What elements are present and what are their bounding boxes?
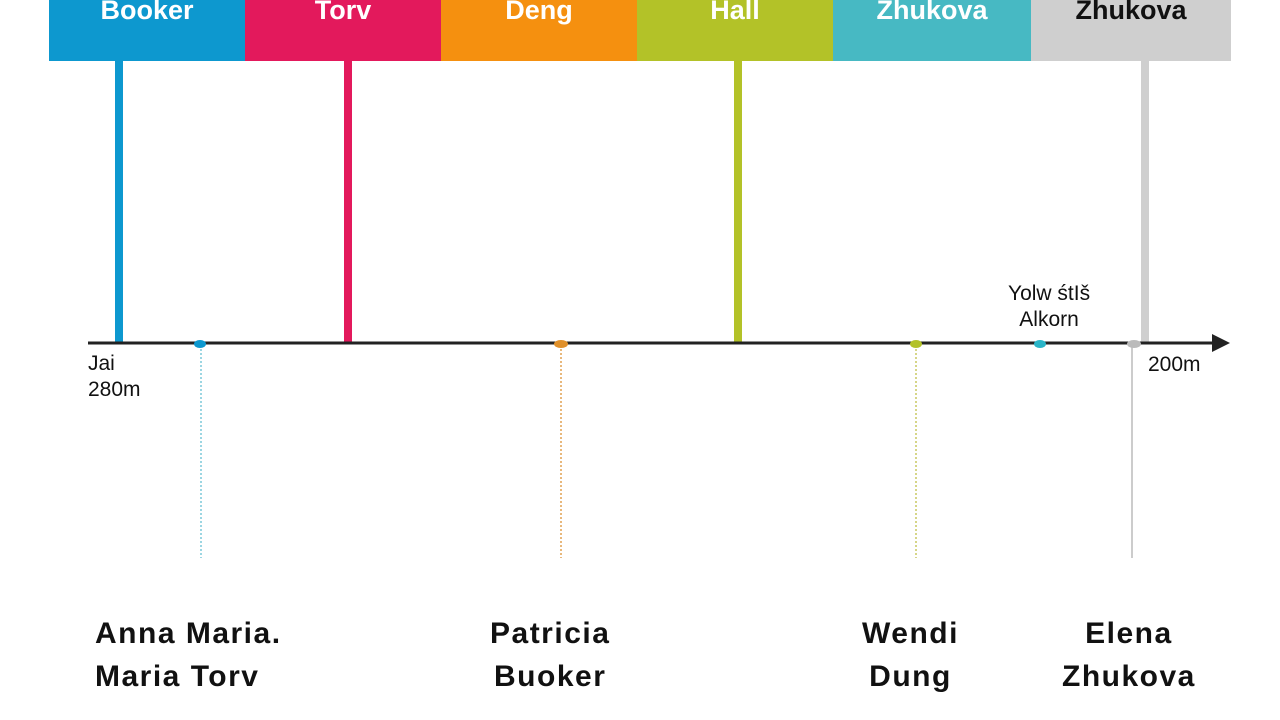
name: Patricia: Buoker: [494, 660, 606, 693]
segment: Zhukova teal: [833, 0, 1031, 61]
header color bar: [49, 0, 1231, 61]
name: Anna Maria: Anna Maria.: [95, 617, 282, 650]
segment: Booker: [49, 0, 245, 61]
name: Elena: [1062, 617, 1196, 693]
axis arrow: [88, 334, 1230, 352]
segment: Hall: [637, 0, 833, 61]
annotation: [1008, 282, 1090, 331]
name: Anna Maria: Maria Torv: [95, 660, 260, 693]
name: Elena: Zhukova: [1062, 660, 1196, 693]
name: Patricia: [490, 617, 610, 693]
name: Anna Maria: [95, 617, 282, 693]
annotation: Alkorn: [1019, 308, 1079, 331]
segment: Torv: [245, 0, 441, 61]
axis start label: Jai: [88, 352, 115, 375]
name: Elena: Elena: [1085, 617, 1173, 650]
name: Patricia: Patricia: [490, 617, 610, 650]
vertical bars: [115, 61, 1149, 343]
annotation: Yolw śtIš: [1008, 282, 1090, 305]
segment: Deng: [441, 0, 637, 61]
axis start label: [88, 352, 141, 401]
name: Wendi: [862, 617, 959, 693]
dotted drop lines: [201, 345, 1132, 558]
name: Wendi: Wendi: [862, 617, 959, 650]
axis end label: 200m: [1148, 353, 1201, 376]
name: Wendi: Dung: [869, 660, 952, 693]
segment: Zhukova gray: [1031, 0, 1231, 61]
axis dots: [194, 340, 1141, 348]
axis start label: 280m: [88, 378, 141, 401]
